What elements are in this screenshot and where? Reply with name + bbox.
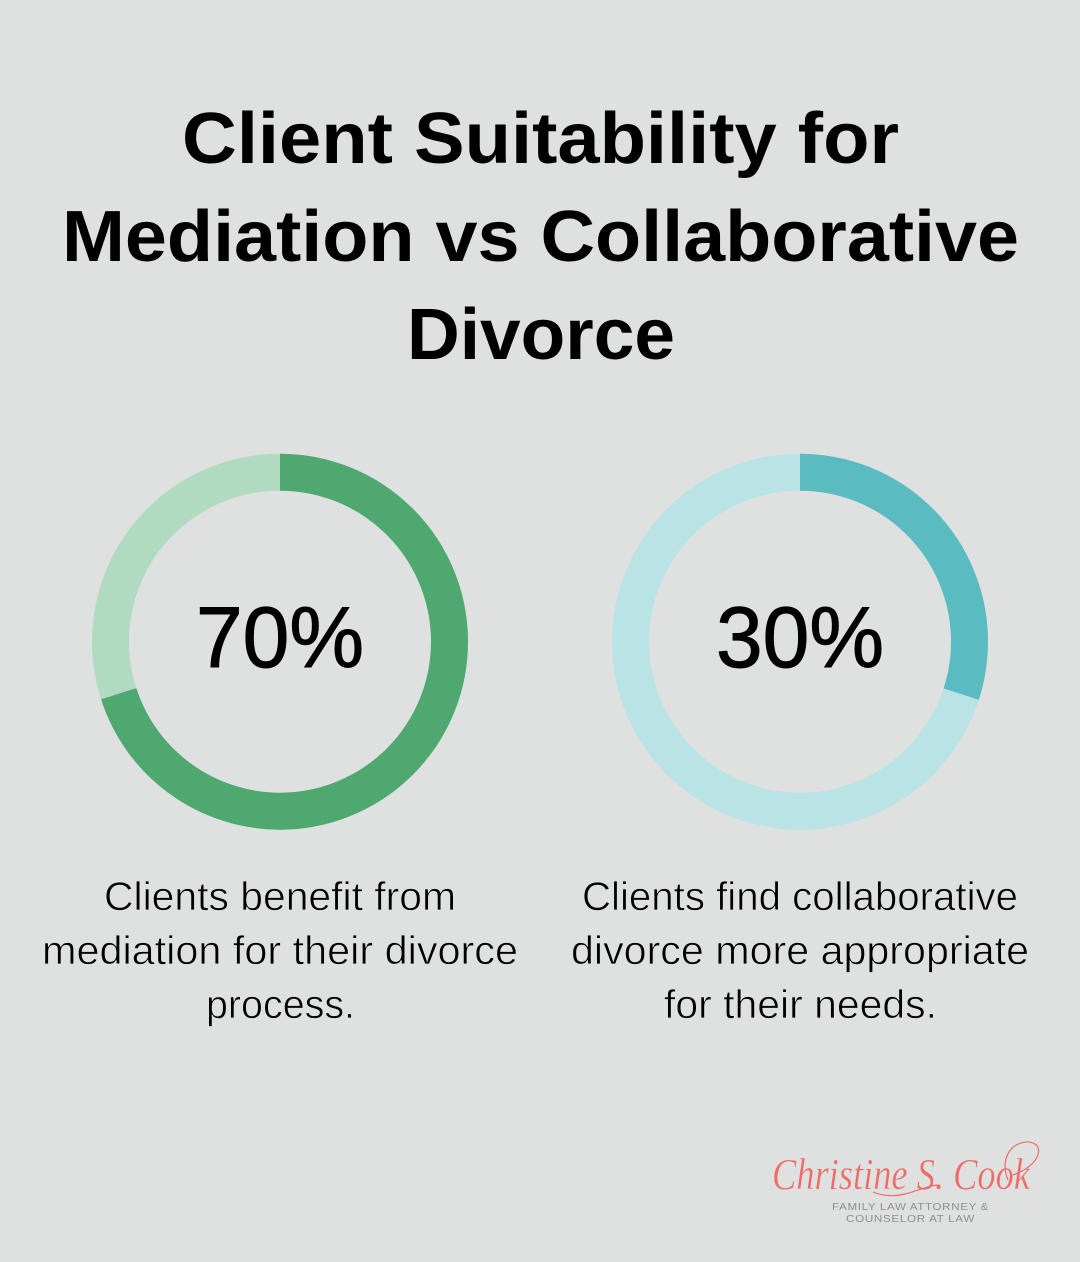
logo: Christine S. Cook: COUNSELOR AT LAW — [846, 1213, 975, 1225]
description: mediation: process. — [206, 983, 355, 1027]
description: mediation: Clients benefit from — [104, 875, 456, 919]
title: Mediation vs Collaborative — [62, 197, 1019, 277]
logo: Christine S. Cook: FAMILY LAW ATTORNEY & — [832, 1201, 989, 1213]
description: mediation: mediation for their divorce — [42, 929, 518, 973]
panel: mediation 70% — [42, 472, 518, 1027]
logo: Christine S. Cook — [772, 1142, 1039, 1225]
description: collaborative: divorce more appropriate — [571, 929, 1029, 973]
title — [62, 99, 1019, 375]
donut chart: 30% — [630, 472, 970, 811]
stat: 30%: 30% — [716, 590, 884, 686]
description: collaborative: for their needs. — [664, 983, 937, 1027]
panel: collaborative 30% — [571, 472, 1029, 1027]
donut chart: 70% — [110, 472, 450, 811]
description: mediation — [42, 875, 518, 1027]
description: collaborative: Clients find collaborative — [582, 875, 1018, 919]
description: collaborative — [571, 875, 1029, 1027]
title: Client Suitability for — [182, 99, 899, 179]
logo: Christine S. Cook: Christine S. Cook — [772, 1150, 1031, 1199]
title: Divorce — [407, 295, 675, 375]
stat: 70%: 70% — [196, 590, 364, 686]
